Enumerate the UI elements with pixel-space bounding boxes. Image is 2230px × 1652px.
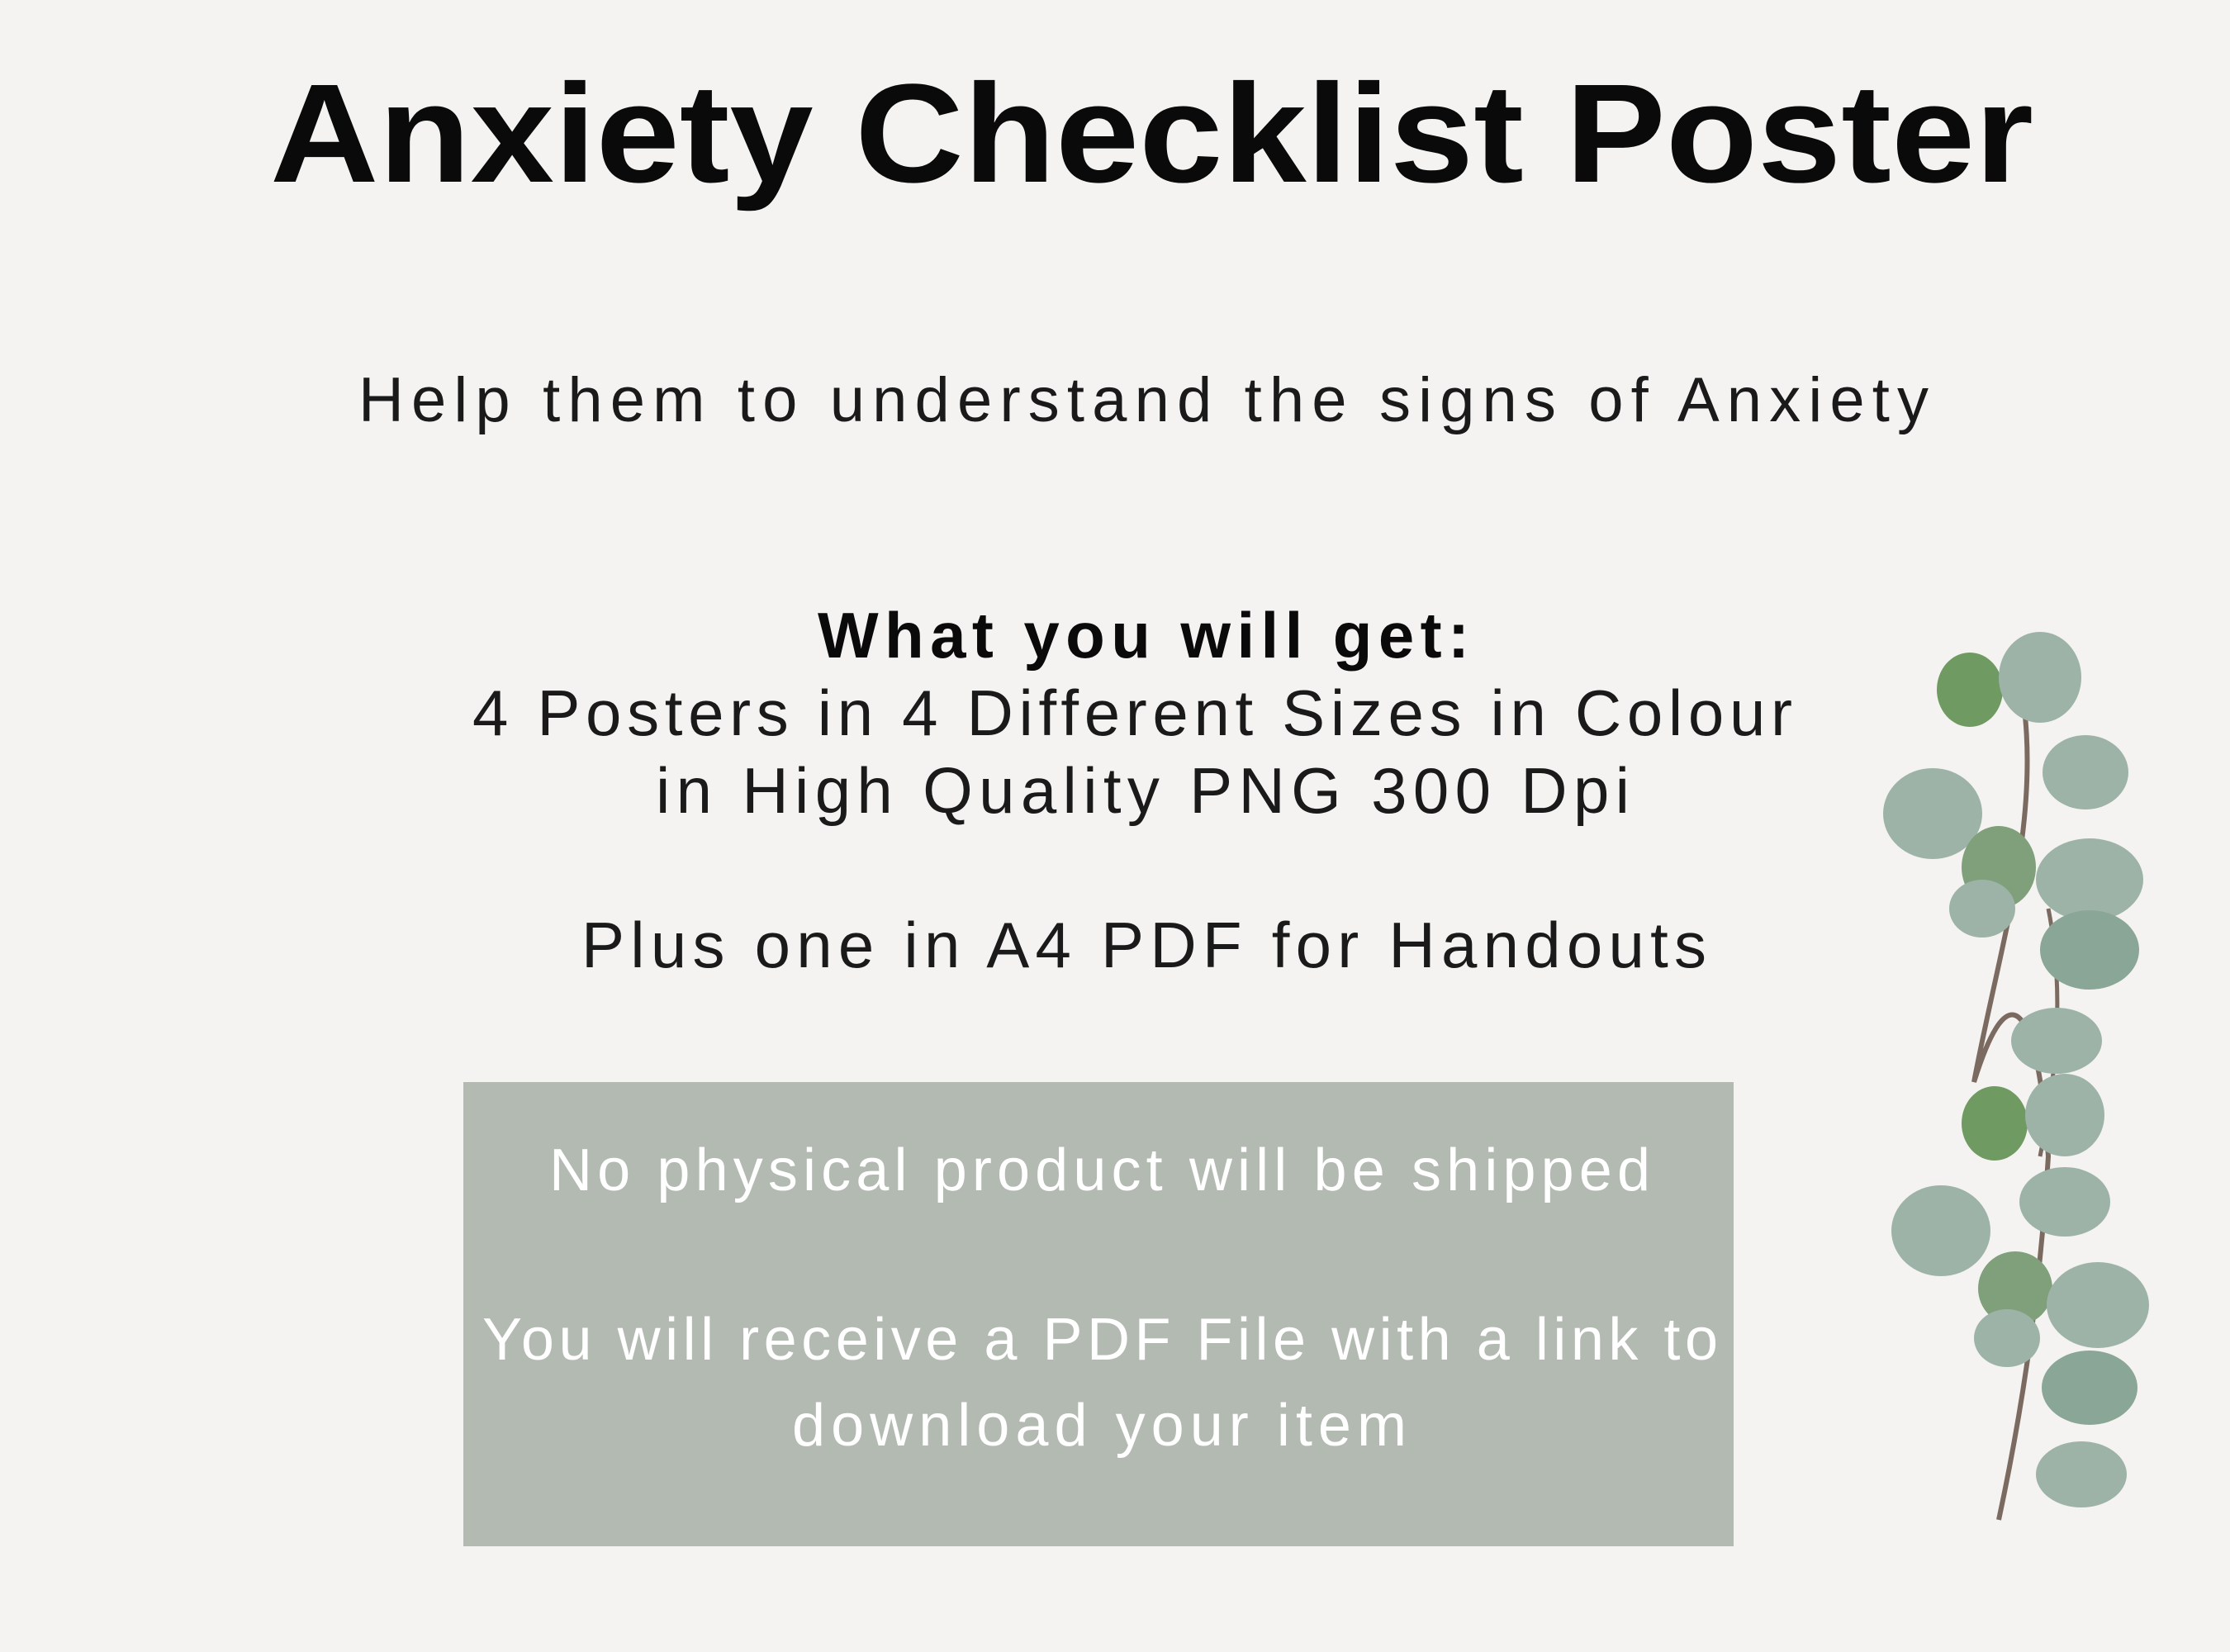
icon: eucalyptus branch [1883, 632, 2149, 1520]
text: download: download your item [792, 1393, 1407, 1459]
subtitle: Help them to understand the signs of Anxiety [358, 365, 1929, 435]
panel: shipping notice [463, 1082, 1734, 1546]
text: posters: 4 Posters in 4 Different Sizes in Colour [472, 676, 1792, 749]
text: no physical product: No physical product will be shipped [549, 1137, 1650, 1203]
text: pdf handout: Plus one in A4 PDF for Handouts [581, 909, 1706, 981]
text: receive pdf: You will receive a PDF File with a link to [482, 1307, 1718, 1373]
text block: what you will get [472, 599, 1792, 981]
text: quality: in High Quality PNG 300 Dpi [656, 754, 1630, 827]
title: Anxiety Checklist Poster [270, 55, 2033, 212]
heading: what you will get: What you will get: [818, 599, 1469, 672]
